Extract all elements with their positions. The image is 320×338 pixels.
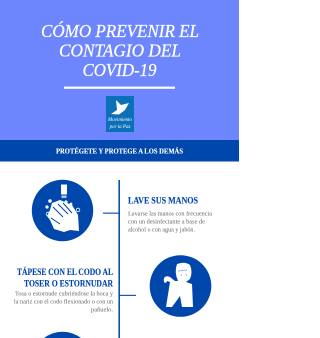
header background: [0, 0, 239, 140]
step 1 text: Lavarse las manos con frecuencia: [128, 210, 212, 218]
logo text: por la Paz: [109, 125, 130, 130]
title underline: [64, 87, 175, 89]
step 1 text: alcohol o con agua y jabón.: [128, 228, 196, 234]
title: CONTAGIO DEL: [59, 40, 181, 60]
timeline line: [118, 180, 120, 338]
step 2 heading: [17, 267, 113, 288]
step 2 text: la nariz con el codo flexionado o con un: [14, 298, 113, 306]
subtitle band: [0, 140, 239, 162]
connector 2: [119, 295, 136, 296]
step 2 text: pañuelo.: [91, 308, 114, 314]
step 2 heading: TOSER O ESTORNUDAR: [24, 278, 113, 288]
icon: washing hands: [32, 180, 93, 241]
step 2 text: Tosa o estornude cubriéndose la boca y: [15, 292, 113, 298]
step 1 text: [128, 210, 212, 234]
logo text: [107, 118, 132, 130]
title: COVID-19: [82, 60, 157, 80]
logo: [106, 96, 134, 132]
title: CÓMO PREVENIR EL: [41, 21, 199, 41]
step 2 text: [14, 292, 114, 314]
icon: person coughing into elbow: [150, 255, 211, 317]
logo text: Movimiento: [107, 118, 132, 123]
step 1 text: con un desinfectante a base de: [128, 218, 205, 226]
step 2 heading: TÁPESE CON EL CODO AL: [17, 267, 113, 277]
subtitle band: PROTÉGETE Y PROTEGE A LOS DEMÁS: [56, 148, 183, 156]
connector 1: [103, 213, 119, 214]
title: [41, 21, 199, 80]
icon: dove: [111, 100, 129, 114]
step 1 heading: LAVE SUS MANOS: [128, 196, 198, 206]
icon: next step circle (cropped): [44, 332, 81, 338]
